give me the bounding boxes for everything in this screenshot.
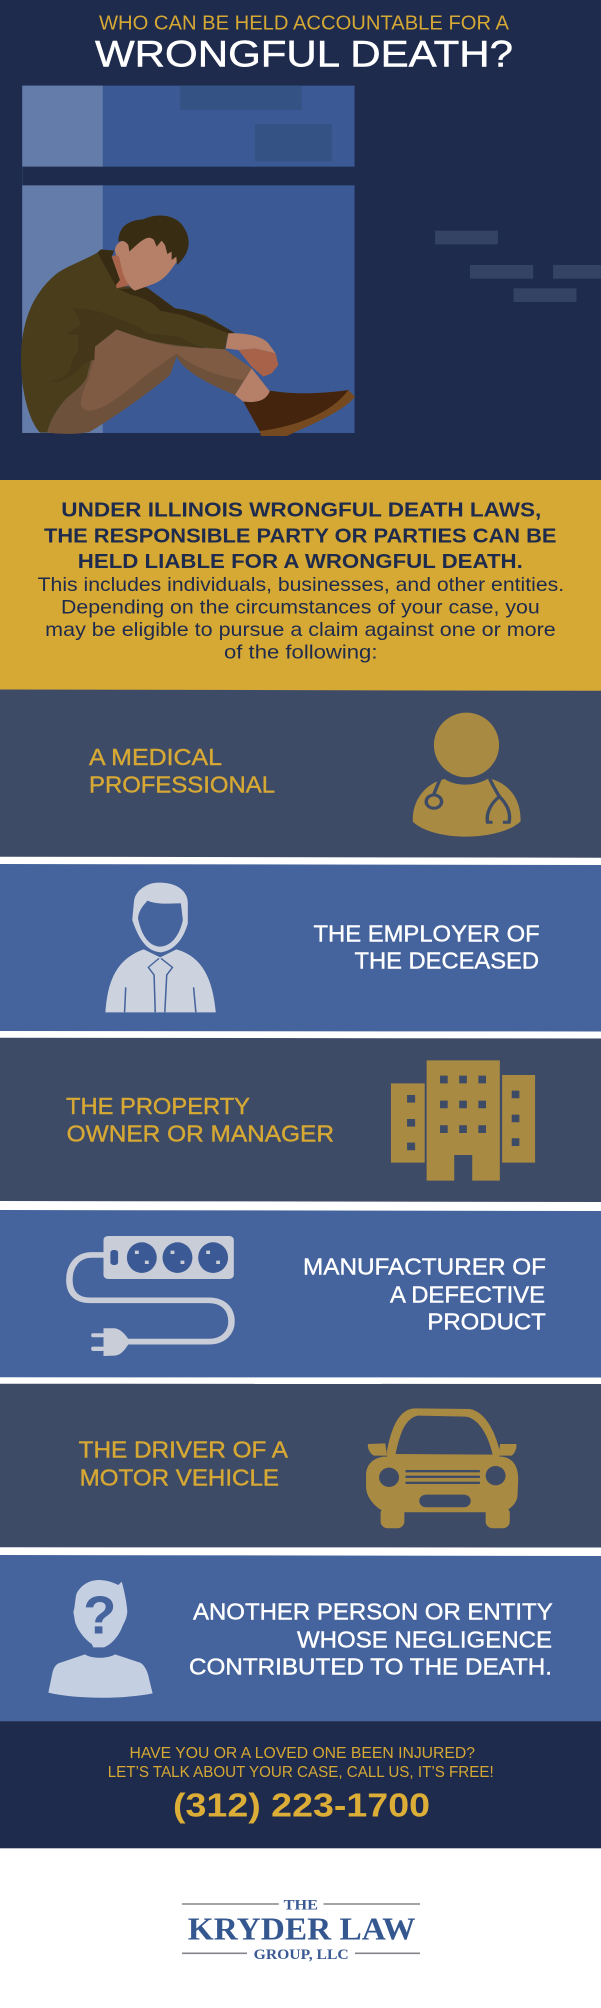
phone number: (312) 223-1700	[173, 1787, 430, 1824]
man: hair	[118, 215, 189, 265]
intro body text: may be eligible to pursue a claim against one or more	[45, 619, 556, 641]
panel: driver	[0, 1384, 601, 1548]
panel: intro	[0, 480, 601, 691]
label: ANOTHER PERSON OR ENTITY	[193, 1598, 553, 1624]
title: kicker: WHO CAN BE HELD ACCOUNTABLE FOR A	[99, 11, 509, 34]
icon: car	[366, 1408, 518, 1528]
label: WHOSE NEGLIGENCE	[297, 1626, 552, 1652]
icon: office buildings	[391, 1060, 535, 1181]
intro body text: of the following:	[224, 642, 378, 664]
man: collar and underarm shadow	[97, 249, 234, 333]
label: A MEDICAL	[89, 744, 222, 770]
logo: The Kryder Law Group, LLC: THE	[284, 1897, 318, 1913]
label: MANUFACTURER OF	[303, 1253, 546, 1279]
label: PRODUCT	[427, 1309, 546, 1335]
label: THE PROPERTY	[66, 1093, 250, 1119]
icon: unknown person	[48, 1580, 153, 1698]
logo: The Kryder Law Group, LLC	[182, 1897, 420, 1963]
label: CONTRIBUTED TO THE DEATH.	[189, 1653, 552, 1679]
man: face	[115, 228, 183, 291]
label	[89, 744, 275, 798]
panel: defective product	[0, 1210, 601, 1378]
icon: man in suit	[105, 883, 216, 1012]
illustration: grieving man	[21, 215, 355, 436]
label	[303, 1253, 546, 1335]
panel: employer	[0, 864, 601, 1032]
intro bold statement: THE RESPONSIBLE PARTY OR PARTIES CAN BE	[44, 524, 556, 547]
label: THE DRIVER OF A	[79, 1437, 288, 1463]
intro body text	[38, 574, 564, 664]
panel: medical professional	[0, 690, 601, 858]
cta text: LET’S TALK ABOUT YOUR CASE, CALL US, IT’S FREE!	[108, 1764, 494, 1781]
intro bold statement: HELD LIABLE FOR A WRONGFUL DEATH.	[78, 550, 523, 573]
man: pants	[47, 329, 252, 434]
label: THE DECEASED	[354, 948, 539, 974]
man: neck	[112, 253, 130, 288]
cta text	[108, 1745, 494, 1781]
logo: The Kryder Law Group, LLC: GROUP, LLC	[254, 1947, 349, 1963]
label: A DEFECTIVE	[390, 1282, 545, 1308]
icon: unknown person: ?	[83, 1586, 116, 1646]
label	[314, 921, 540, 974]
intro bold statement: UNDER ILLINOIS WRONGFUL DEATH LAWS,	[61, 499, 541, 522]
cta text: HAVE YOU OR A LOVED ONE BEEN INJURED?	[130, 1745, 475, 1762]
man: jacket	[21, 253, 235, 433]
label: MOTOR VEHICLE	[80, 1464, 279, 1490]
label	[66, 1093, 334, 1147]
icon: power strip	[69, 1236, 234, 1356]
label: OWNER OR MANAGER	[67, 1121, 334, 1147]
label	[189, 1598, 553, 1679]
illustration: window	[22, 86, 355, 433]
man: jacket fold shadow	[48, 308, 205, 382]
intro body text: This includes individuals, businesses, and other entities.	[38, 574, 564, 596]
man: shoe	[243, 390, 350, 432]
intro body text: Depending on the circumstances of your case, you	[61, 596, 540, 618]
intro bold statement	[44, 499, 556, 573]
label	[79, 1437, 288, 1490]
label: PROFESSIONAL	[89, 772, 275, 798]
man: shin	[235, 368, 270, 402]
label: THE EMPLOYER OF	[314, 921, 540, 947]
icon: doctor with stethoscope	[413, 713, 521, 837]
panel: another person or entity	[0, 1555, 601, 1722]
title: main heading: WRONGFUL DEATH?	[95, 34, 513, 75]
decorative wall bricks	[435, 231, 601, 302]
panel: call to action	[0, 1721, 601, 1848]
logo: The Kryder Law Group, LLC: KRYDER LAW	[188, 1910, 416, 1946]
panel: property owner	[0, 1038, 601, 1202]
man: hands	[238, 348, 278, 377]
panel: header	[0, 0, 601, 481]
